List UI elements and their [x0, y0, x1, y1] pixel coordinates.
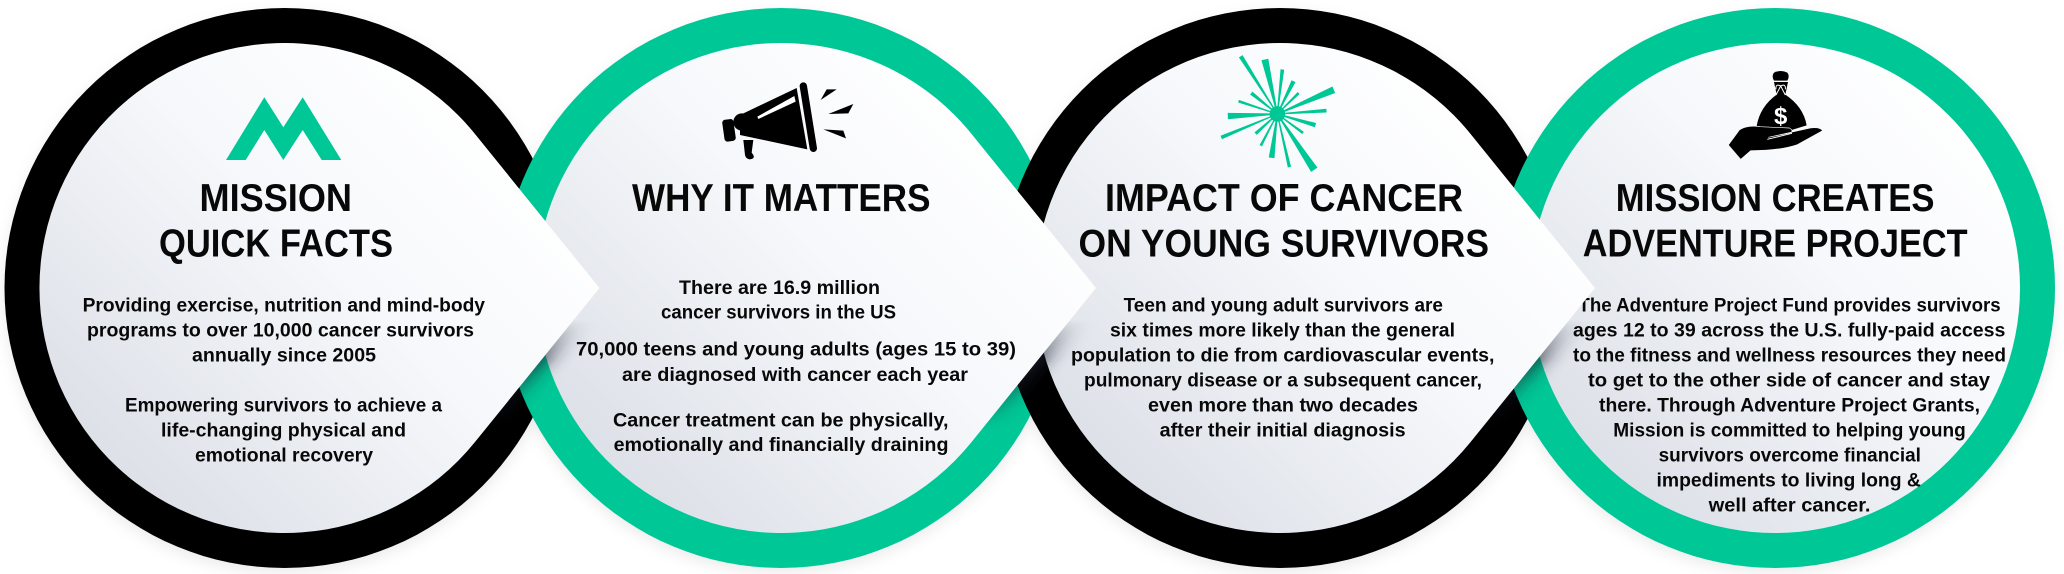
body text: programs to over 10,000 cancer survivors — [87, 320, 474, 341]
heading: MISSION — [200, 177, 352, 220]
heading: WHY IT MATTERS — [632, 177, 930, 220]
body text: emotionally and financially draining — [614, 435, 948, 456]
panel 1 teardrop — [39, 43, 599, 533]
shadow under arrow 2 — [987, 323, 1078, 424]
body text: cancer survivors in the US — [661, 303, 896, 324]
body text: Teen and young adult survivors are — [1124, 295, 1443, 316]
body text: 70,000 teens and young adults (ages 15 to 39) — [576, 340, 1016, 361]
panel: mission creates adventure project — [1530, 43, 2020, 533]
icon: hand holding money bag: $ — [1774, 103, 1787, 130]
panel 3 teardrop — [1035, 43, 1595, 533]
icon: starburst — [1221, 56, 1334, 171]
ring 3 black — [1000, 8, 1560, 568]
body text: life-changing physical and — [161, 421, 406, 442]
body text — [83, 295, 485, 466]
body text: after their initial diagnosis — [1160, 421, 1406, 442]
heading: QUICK FACTS — [159, 222, 393, 266]
body text: are diagnosed with cancer each year — [622, 365, 969, 386]
body text: Mission is committed to helping young — [1613, 421, 1966, 442]
body text: The Adventure Project Fund provides survivors — [1578, 295, 2001, 316]
body text — [1071, 295, 1494, 442]
body text: annually since 2005 — [192, 346, 376, 366]
body text: to get to the other side of cancer and stay — [1588, 370, 1990, 392]
ring 4 green — [1495, 8, 2055, 568]
panel: mission quick facts — [39, 43, 599, 533]
heading: ON YOUNG SURVIVORS — [1078, 222, 1489, 266]
shadow under arrow 3 — [1498, 323, 1578, 408]
body text: six times more likely than the general — [1110, 320, 1455, 341]
body text: survivors overcome financial — [1659, 446, 1921, 466]
body text: well after cancer. — [1708, 496, 1870, 516]
body text — [1573, 295, 2006, 516]
ring 2 green — [501, 8, 1061, 568]
body text: pulmonary disease or a subsequent cancer, — [1084, 370, 1482, 392]
panel 2 teardrop — [536, 43, 1096, 533]
body text: impediments to living long & — [1656, 470, 1921, 492]
heading — [1078, 177, 1489, 266]
body text: Providing exercise, nutrition and mind-body — [83, 295, 485, 316]
icon: mountain M logo — [226, 97, 341, 160]
shadow under arrow 1 — [503, 323, 582, 408]
panel: impact of cancer on young survivors — [1035, 43, 1595, 533]
body text: emotional recovery — [195, 446, 373, 466]
panel: why it matters — [536, 43, 1096, 533]
icon: hand holding money bag — [1728, 71, 1823, 159]
icon: megaphone — [722, 86, 853, 159]
body text: to the fitness and wellness resources they need — [1573, 346, 2006, 366]
ring 1 black — [4, 8, 564, 568]
body text: Empowering survivors to achieve a — [125, 396, 442, 416]
body text: even more than two decades — [1148, 396, 1418, 416]
heading — [1583, 177, 1968, 266]
body text — [576, 278, 1016, 456]
body text: population to die from cardiovascular events, — [1071, 346, 1494, 366]
panel 4 fill — [1530, 43, 2020, 533]
heading: IMPACT OF CANCER — [1105, 177, 1463, 220]
body text: ages 12 to 39 across the U.S. fully-paid access — [1573, 320, 2005, 341]
body text: Cancer treatment can be physically, — [613, 410, 948, 431]
heading: MISSION CREATES — [1616, 177, 1934, 220]
body text: there. Through Adventure Project Grants, — [1599, 396, 1980, 416]
body text: There are 16.9 million — [679, 278, 880, 299]
heading: ADVENTURE PROJECT — [1583, 222, 1968, 266]
heading — [159, 177, 393, 266]
